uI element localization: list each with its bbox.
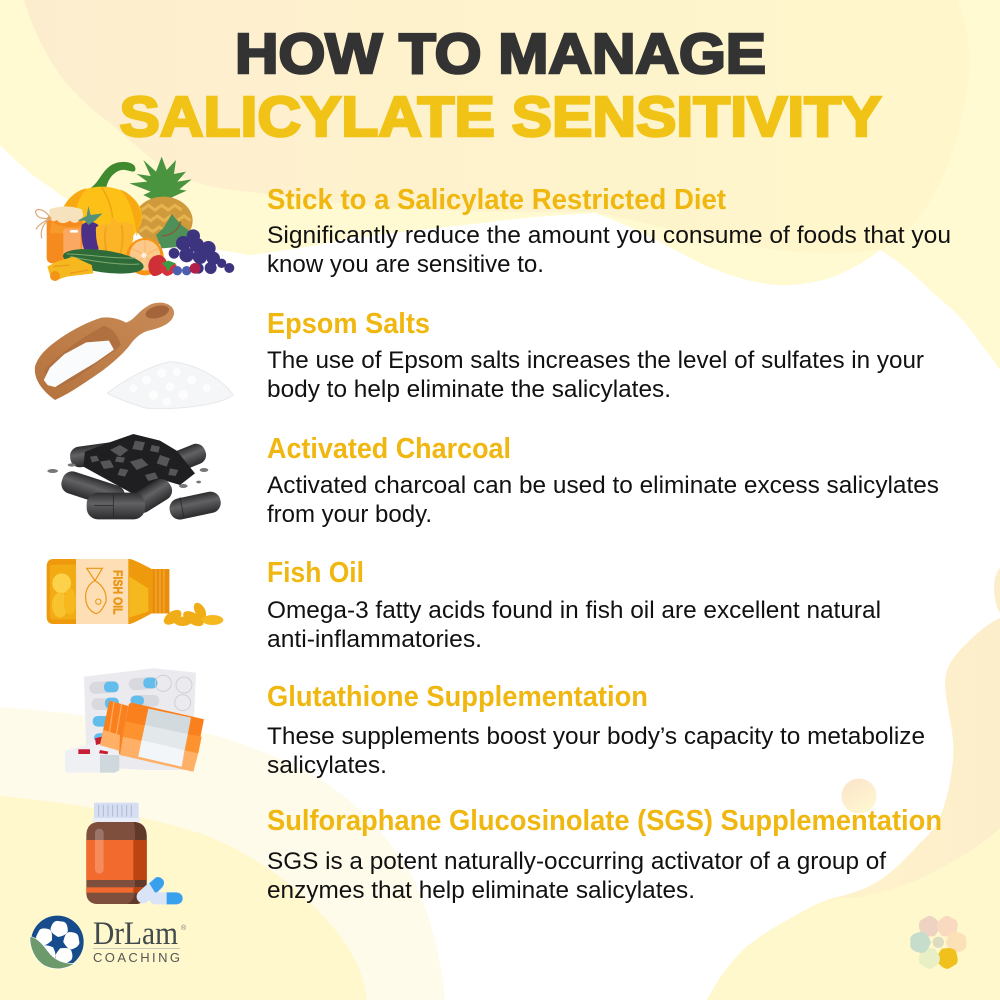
item: activated charcoal text: [267, 433, 939, 528]
item: salicylate restricted diet text: [267, 184, 951, 278]
item: SGS text: [267, 805, 942, 904]
item: epsom salts text: Epsom Salts: [267, 308, 430, 340]
item: glutathione text: [267, 681, 925, 779]
icon: wooden scoop with epsom salts: [35, 303, 233, 409]
item: SGS text: SGS is a potent naturally-occurring activator of a group of: [267, 848, 886, 875]
item: SGS text: enzymes that help eliminate salicylates.: [267, 877, 695, 904]
logo: DrLam Coaching: ®: [181, 924, 187, 932]
title: SALICYLATE SENSITIVITY: [120, 85, 882, 149]
icon: pastel flower emblem: [910, 913, 966, 972]
item: salicylate restricted diet text: know you are sensitive to.: [267, 251, 544, 278]
item: glutathione text: Glutathione Supplementation: [267, 681, 648, 713]
logo: DrLam Coaching: DrLam: [93, 916, 178, 952]
icon: fruit and vegetables: [36, 157, 234, 281]
icon: activated charcoal capsules: [47, 434, 223, 521]
icon: glutathione pill blister and bottle: [65, 668, 204, 773]
item: epsom salts text: body to help eliminate the salicylates.: [267, 376, 671, 403]
item: SGS text: Sulforaphane Glucosinolate (SGS) Supplementation: [267, 805, 942, 837]
item: fish oil text: Fish Oil: [267, 557, 364, 589]
title: HOW TO MANAGE: [235, 22, 766, 86]
item: fish oil text: Omega-3 fatty acids found in fish oil are excellent natural: [267, 597, 881, 624]
item: fish oil text: anti-inflammatories.: [267, 626, 482, 653]
item: fish oil text: [267, 557, 881, 653]
logo emblem: [30, 916, 84, 969]
icon: fish oil bottle: [47, 559, 223, 629]
icon: fish oil bottle: FISH OIL: [110, 570, 125, 615]
item: epsom salts text: [267, 308, 924, 403]
item: salicylate restricted diet text: Significantly reduce the amount you consume of foods that you: [267, 222, 951, 249]
item: glutathione text: salicylates.: [267, 752, 387, 779]
item: activated charcoal text: Activated charcoal can be used to eliminate excess salicylates: [267, 472, 939, 499]
item: activated charcoal text: from your body.: [267, 501, 432, 528]
logo: DrLam Coaching: COACHING: [93, 950, 180, 965]
item: glutathione text: These supplements boost your body’s capacity to metabolize: [267, 723, 925, 750]
logo: DrLam Coaching: [30, 916, 187, 969]
title: [120, 22, 882, 149]
icon: SGS supplement bottle and capsules: [86, 803, 183, 906]
item: epsom salts text: The use of Epsom salts increases the level of sulfates in your: [267, 347, 924, 374]
item: salicylate restricted diet text: Stick to a Salicylate Restricted Diet: [267, 184, 726, 216]
item: activated charcoal text: Activated Charcoal: [267, 433, 511, 465]
